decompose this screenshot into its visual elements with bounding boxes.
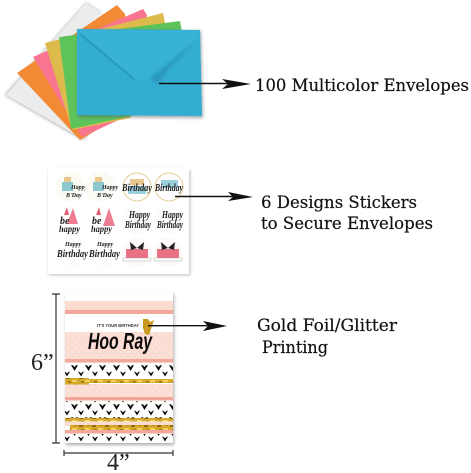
gold glitter stripes <box>65 378 173 430</box>
card title: Hoo Ray: Hoo Ray <box>88 328 153 354</box>
sticker: be happy: happy <box>59 224 81 234</box>
sticker: happy birthday <box>122 205 152 235</box>
sticker: script birthday: Happy <box>64 242 82 248</box>
arrow: to envelopes label <box>159 79 251 89</box>
sticker: happy birthday: Birthday <box>156 220 183 231</box>
sticker: pink bow <box>122 237 152 267</box>
envelope: green <box>59 21 182 129</box>
gold foil ornament <box>143 319 154 335</box>
sticker: happy birthday: Happy <box>128 210 150 221</box>
sticker: be happy: be <box>60 216 70 227</box>
sticker: happy birthday: Birthday <box>124 220 151 231</box>
envelope: orange <box>17 5 130 140</box>
sticker: cake: Happy <box>101 185 119 191</box>
label: 100 multicolor envelopes: 100 Multicolor Envelopes <box>255 76 469 95</box>
sticker: cake: B'Day <box>65 193 82 199</box>
envelope flap <box>78 30 199 80</box>
sticker: be happy <box>59 207 81 234</box>
sticker: script birthday <box>88 238 121 268</box>
envelope: pink <box>33 9 147 137</box>
dimension: width 4 inches <box>64 450 173 473</box>
sticker: cake: Happy <box>70 185 88 191</box>
sticker set <box>55 172 184 268</box>
label: 6 designs stickers: 6 Designs Stickers <box>261 193 417 212</box>
sticker: cake <box>85 172 119 202</box>
sticker: happy birthday: Happy <box>161 210 183 221</box>
sticker: script birthday <box>56 238 89 268</box>
label: gold foil/glitter: Gold Foil/Glitter <box>257 316 397 335</box>
card stripes <box>65 301 173 443</box>
dimension: height 6 inches <box>31 294 60 443</box>
label: printing: Printing <box>262 338 328 357</box>
sticker: script birthday: Happy <box>96 242 114 248</box>
sticker: script birthday: Birthday <box>56 248 88 260</box>
sticker: pink bow <box>153 237 183 267</box>
envelope: white <box>5 3 120 140</box>
envelope: yellow <box>45 13 165 130</box>
sticker: cake <box>55 172 88 202</box>
sticker: script birthday: Birthday <box>88 248 120 260</box>
sticker: happy birthday <box>154 205 184 235</box>
envelope: blue <box>77 29 203 118</box>
arrow: to gold foil label <box>148 321 227 331</box>
birthday card <box>65 292 174 445</box>
sticker: be happy: be <box>92 216 102 227</box>
sticker: be happy: happy <box>91 224 113 234</box>
sticker: cake: B'Day <box>96 193 113 199</box>
sticker: be happy <box>91 207 115 234</box>
sticker: birthday ring: Birthday <box>154 183 183 194</box>
envelope fan: 100 multicolor envelopes <box>5 3 203 140</box>
dimension: height 6 inches: 6” <box>31 350 54 376</box>
card small heading: IT'S YOUR BIRTHDAY <box>97 323 139 328</box>
label: to secure envelopes: to Secure Envelopes <box>261 214 433 233</box>
arrow: to stickers label <box>175 192 253 201</box>
sticker: birthday ring: Birthday <box>121 183 152 194</box>
sticker sheet <box>48 168 190 275</box>
